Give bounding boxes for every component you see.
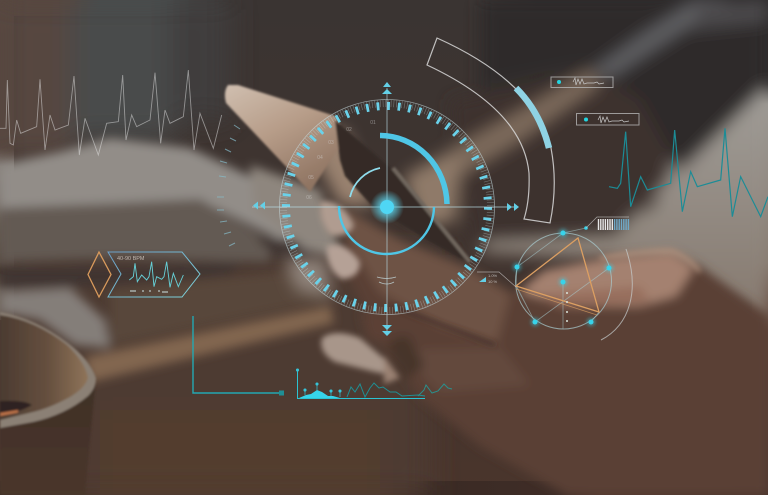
arc outline <box>427 38 554 223</box>
arrow down <box>382 325 392 336</box>
BPM diamond icon <box>88 252 111 297</box>
outer ring <box>280 100 494 314</box>
orange base echo line <box>516 289 597 315</box>
lower inner arc <box>339 206 434 254</box>
thick ticks <box>286 106 488 308</box>
filled peak <box>299 390 340 398</box>
dial numerals: 04 <box>317 155 323 161</box>
bottom peak chart <box>296 369 452 398</box>
dial numerals: 05 <box>308 175 314 181</box>
dial numerals <box>306 120 376 201</box>
line series <box>347 383 425 397</box>
outer radar arc <box>601 249 632 340</box>
network lines <box>516 228 609 329</box>
chart axis <box>298 370 425 398</box>
left white heartbeat waveform <box>0 70 222 155</box>
BPM label: 40-90 BPM <box>117 256 145 262</box>
dial numerals: 03 <box>328 140 334 146</box>
mini monitor box one <box>551 77 613 88</box>
mini monitor box two <box>576 114 639 125</box>
center glow dot <box>370 190 404 224</box>
connector to bars <box>586 217 629 228</box>
marker pins <box>296 369 341 397</box>
crosshair lines <box>252 88 518 335</box>
coffee cup <box>0 312 96 495</box>
thick upper-right arc <box>380 136 447 204</box>
dial numerals: 06 <box>306 195 312 201</box>
top right arc gauge <box>427 38 554 223</box>
left connector and readout <box>477 272 516 287</box>
arrow right <box>507 203 519 211</box>
orange triangle <box>516 238 599 312</box>
faint left tick arc <box>217 125 240 246</box>
central compass dial <box>217 82 519 336</box>
cyan arc segment <box>516 88 549 148</box>
arrow up <box>382 82 392 94</box>
upper-left inner arc <box>350 168 380 197</box>
thin ticks <box>284 104 490 310</box>
L-shaped axis <box>193 316 284 396</box>
network nodes <box>514 226 612 324</box>
right teal heartbeat waveform <box>609 128 768 217</box>
level bars <box>598 219 628 230</box>
dial numerals: 02 <box>346 127 352 133</box>
line series end <box>418 384 452 396</box>
BPM dots <box>130 291 168 292</box>
left connector and readout: 10 % <box>488 279 498 284</box>
radar circle <box>516 233 612 329</box>
arrow left <box>253 202 265 210</box>
radar value dots <box>566 292 568 322</box>
lower double curve <box>377 277 396 284</box>
BPM pentagon panel <box>108 252 200 297</box>
radar network diagram <box>477 217 632 340</box>
dial numerals: 01 <box>370 120 376 126</box>
node glows <box>512 228 614 326</box>
left connector and readout: 1.0% <box>488 273 498 278</box>
BPM waveform <box>129 262 183 287</box>
